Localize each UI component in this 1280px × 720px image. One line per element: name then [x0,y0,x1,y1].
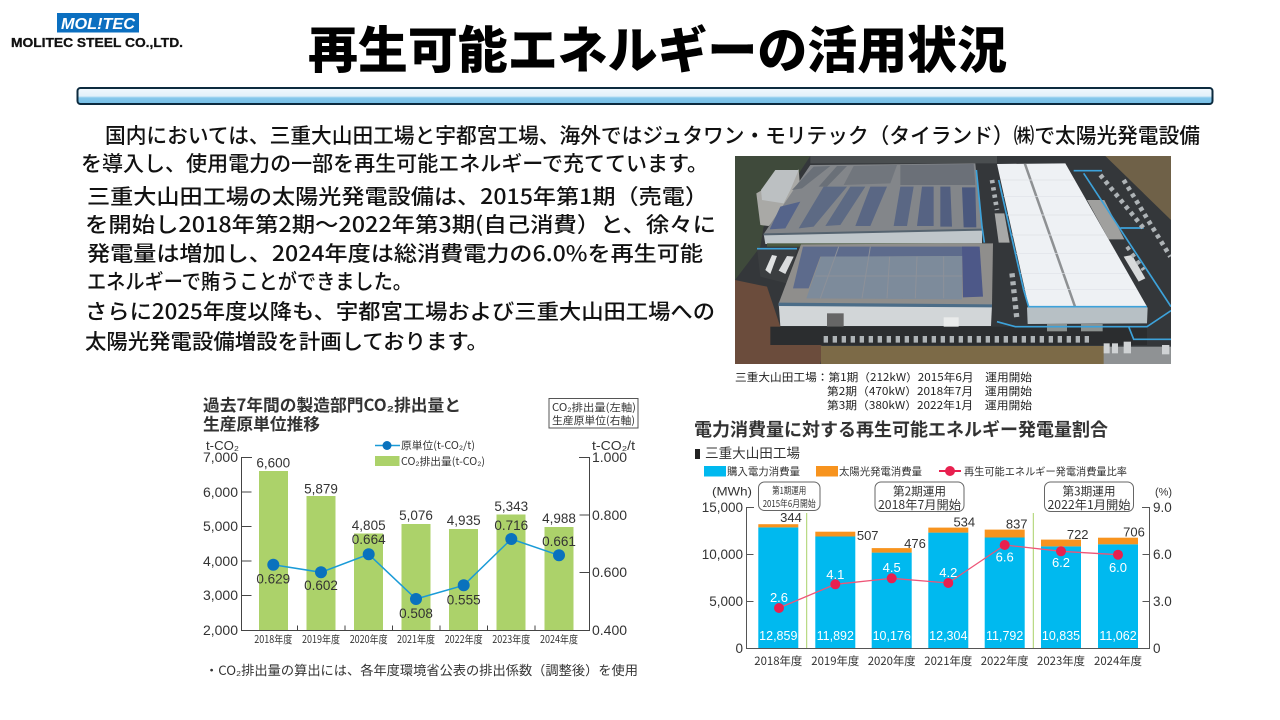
bar values: 5,076 [399,508,433,523]
purchased values: 11,892 [817,629,854,643]
chart title [203,392,461,435]
year labels: 2019年度 [302,632,340,647]
header bar [78,88,1212,104]
line values: 0.716 [494,518,528,533]
axis labels: 0.400 [592,622,627,638]
axis labels: 0.800 [592,507,627,523]
axis note box: CO₂排出量(左軸) [552,400,636,415]
chart title: 電力消費量に対する再生可能エネルギー発電量割合 [694,416,1108,442]
axis labels: 10,000 [702,547,743,562]
solar values: 706 [1123,524,1145,540]
line values: 0.664 [352,532,386,547]
year labels: 2019年度 [811,653,860,669]
year labels: 2022年度 [445,632,483,647]
year labels: 2022年度 [981,653,1029,669]
axis labels [702,484,1172,656]
axis labels: 3.0 [1153,594,1172,609]
bar values: 4,805 [352,518,386,533]
purchased values: 11,062 [1099,629,1137,643]
solar values: 344 [780,510,802,525]
logo: Molitec Steel: MOLITEC STEEL CO.,LTD. [11,36,183,50]
chart title: 過去7年間の製造部門CO₂排出量と [203,392,461,416]
ratio values: 6.6 [996,550,1014,564]
bar values: 5,879 [304,482,338,496]
parked cars, drawn as dashed strokes [824,175,1170,339]
axis labels: t-CO₂ [206,439,239,453]
photo caption [735,369,1032,413]
axis labels: 4,000 [203,553,238,569]
bar values: 4,988 [542,511,576,526]
body text: を開始し2018年第2期～2022年第3期(自己消費）と、徐々に [85,209,716,239]
legend: 購入電力消費量 [727,464,800,479]
year labels: 2018年度 [254,632,293,647]
year labels: 2020年度 [868,653,916,669]
year labels: 2024年度 [1094,653,1142,669]
photo caption: 第2期（470kW）2018年7月 運用開始 [827,383,1032,399]
body text: さらに2025年度以降も、宇都宮工場および三重大山田工場への [85,296,715,326]
axis labels: 5,000 [203,518,238,534]
purchased values: 10,176 [873,629,911,643]
year labels: 2020年度 [350,632,388,647]
axis labels: t-CO₂/t [592,439,636,453]
ratio values: 6.2 [1052,555,1070,570]
solar values: 507 [857,528,879,543]
solar values: 837 [1006,516,1028,532]
axis labels: 6.0 [1153,547,1172,562]
line values: 0.508 [399,606,433,621]
bars: CO2 emissions [259,471,574,630]
photo caption: 第3期（380kW）2022年1月 運用開始 [827,397,1032,413]
phase callouts: 第3期運用 [1062,482,1116,500]
legend [704,464,1127,479]
line values: 0.629 [256,572,290,586]
axis labels: 0 [1153,641,1161,656]
phase callouts: 2022年1月開始 [1048,496,1130,513]
ratio values: 4.1 [826,567,844,582]
purchased values: 12,304 [929,629,967,643]
line values: 0.555 [447,592,481,608]
purchased values: 10,835 [1042,629,1080,643]
line values: 0.602 [304,578,338,593]
logo: Molitec Steel: MOL!TEC [61,16,135,33]
axis labels: 0 [735,641,743,656]
axis labels: 15,000 [702,500,743,515]
axis labels: 7,000 [203,449,238,465]
ratio values: 6.0 [1109,560,1127,575]
subheading: 三重大山田工場 [705,442,800,462]
year labels [254,632,578,647]
ratio values: 4.5 [883,560,901,575]
intro text: 国内においては、三重大山田工場と宇都宮工場、海外ではジュタワン・モリテック（タイランド）㈱で太陽光発電設備 [105,120,1200,150]
axis note box: 生産原単位(右軸) [552,413,635,428]
axis labels: (MWh) [712,484,752,498]
axis labels: 9.0 [1153,500,1172,515]
logo: Molitec Steel [11,13,183,50]
axis labels: 2,000 [203,622,238,638]
bar values [256,456,576,533]
purchased values [759,629,1137,643]
intro text: を導入し、使用電力の一部を再生可能エネルギーで充てています。 [81,148,708,178]
axis labels: (%) [1155,486,1172,498]
axes [242,458,590,630]
ratio values [770,550,1127,605]
phase callouts: 2015年6月開始 [763,496,816,510]
body text: エネルギーで賄うことができました。 [87,266,412,296]
year labels [754,653,1142,669]
year labels: 2018年度 [754,653,803,669]
purchased values: 11,792 [986,629,1023,643]
legend: CO₂排出量(t-CO₂) [401,454,485,469]
solar values: 476 [904,536,926,551]
body text: 三重大山田工場の太陽光発電設備は、2015年第1期（売電） [87,181,708,211]
phase callouts: 第2期運用 [893,482,946,500]
legend: 太陽光発電消費量 [839,464,922,479]
bar values: 6,600 [256,456,290,470]
body text: 太陽光発電設備増設を計画しております。 [85,326,488,356]
body text [85,181,716,356]
purchased values: 12,859 [759,629,797,643]
body text: 発電量は増加し、2024年度は総消費電力の6.0%を再生可能 [87,238,703,268]
solar values: 534 [953,514,975,530]
axis labels [203,439,636,638]
line: intensity [267,533,565,605]
line: renewable ratio [774,540,1123,613]
photo: aerial view of Mie Oyamada plant [735,156,1171,364]
solar values: 722 [1067,527,1089,542]
phase callouts [758,482,1134,513]
axis labels: 1.000 [592,449,627,465]
intro text [81,120,1200,178]
axes [746,508,1150,648]
axis labels: 0.600 [592,564,627,580]
phase divider lines [807,513,1033,648]
bar values: 4,935 [447,513,481,528]
bars: purchased power [758,527,1138,648]
axis labels: 3,000 [203,587,238,603]
year labels: 2023年度 [492,632,531,647]
year labels: 2021年度 [397,632,435,647]
line values: 0.661 [542,534,576,549]
chart title: 生産原単位推移 [203,411,320,435]
line values [256,518,576,621]
year labels: 2021年度 [924,653,973,669]
bar values: 5,343 [494,499,528,514]
ratio values: 4.2 [939,565,957,580]
ratio values: 2.6 [770,590,788,605]
phase callouts: 2018年7月開始 [878,496,961,513]
legend: 再生可能エネルギー発電消費量比率 [964,464,1127,479]
solar values [780,510,1145,551]
axis labels: 5,000 [709,594,743,609]
year labels: 2023年度 [1037,653,1085,669]
chart: CO2 emissions and intensity [203,392,638,647]
chart footnote: ・CO₂排出量の算出には、各年度環境省公表の排出係数（調整後）を使用 [205,660,638,679]
axis labels: 6,000 [203,484,238,500]
axis note box [549,398,638,428]
phase callouts: 第1期運用 [772,483,806,497]
chart: renewable share of power consumption [694,416,1172,669]
title: 再生可能エネルギーの活用状況 [308,11,1007,83]
year labels: 2024年度 [540,632,578,647]
legend: 原単位(t-CO₂/t) [401,438,475,453]
bars: solar consumption [758,524,1138,553]
photo caption: 三重大山田工場：第1期（212kW）2015年6月 運用開始 [735,369,1032,385]
legend [375,438,485,469]
